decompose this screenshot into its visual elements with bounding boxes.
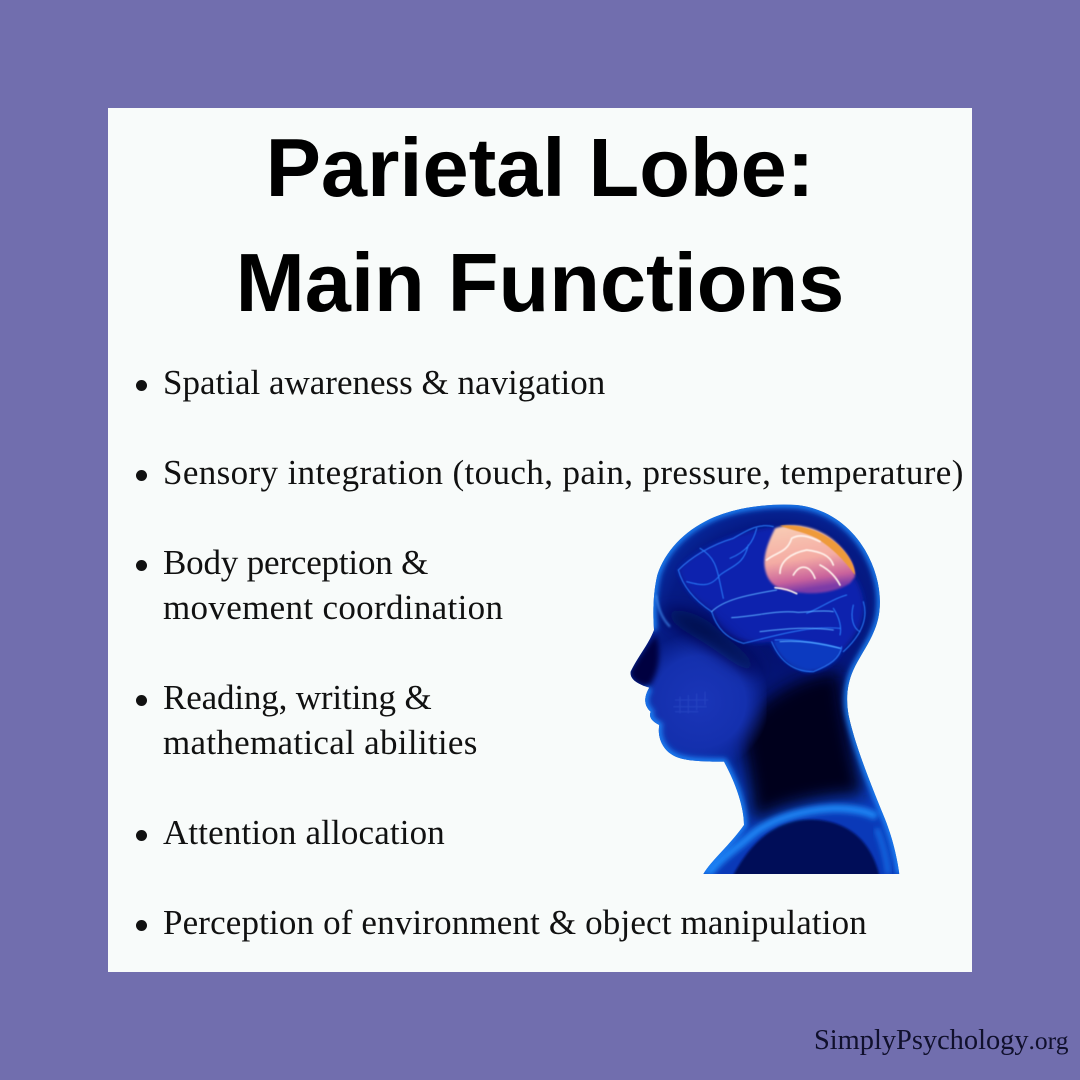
- icon: cheek teeth texture: [673, 692, 708, 713]
- chest dark: [732, 820, 880, 878]
- icon: brain folds: [678, 526, 865, 672]
- icon: highlighted parietal lobe: [764, 525, 855, 594]
- bullet list: mathematical abilities: [163, 723, 478, 762]
- bullet list: Spatial awareness & navigation: [163, 363, 605, 402]
- title: Main Functions: [236, 236, 844, 329]
- dark neck: [740, 672, 863, 822]
- rim glow: [645, 505, 899, 874]
- footer: source credit: SimplyPsychology.org: [814, 1025, 1068, 1056]
- bullet list: movement coordination: [163, 588, 503, 627]
- shoulder glow: [708, 808, 877, 874]
- title: Parietal Lobe:: [266, 121, 814, 214]
- icon: glowing blue head with highlighted parietal lobe: [630, 504, 900, 874]
- bullet list: Perception of environment & object manipulation: [163, 903, 867, 942]
- title: [236, 121, 844, 329]
- nose shadow: [630, 635, 659, 687]
- brain tissue: [678, 527, 864, 672]
- cerebellum: [773, 640, 842, 672]
- panel: white card: [108, 108, 972, 972]
- bullet list: Reading, writing &: [163, 678, 432, 717]
- bullet list: Attention allocation: [163, 813, 445, 852]
- face tone: [638, 638, 766, 762]
- bullet list: Body perception &: [163, 543, 428, 582]
- forehead highlight: [656, 595, 670, 627]
- brow shadow: [663, 610, 760, 675]
- bullet list: Sensory integration (touch, pain, pressure, temperature): [163, 453, 964, 492]
